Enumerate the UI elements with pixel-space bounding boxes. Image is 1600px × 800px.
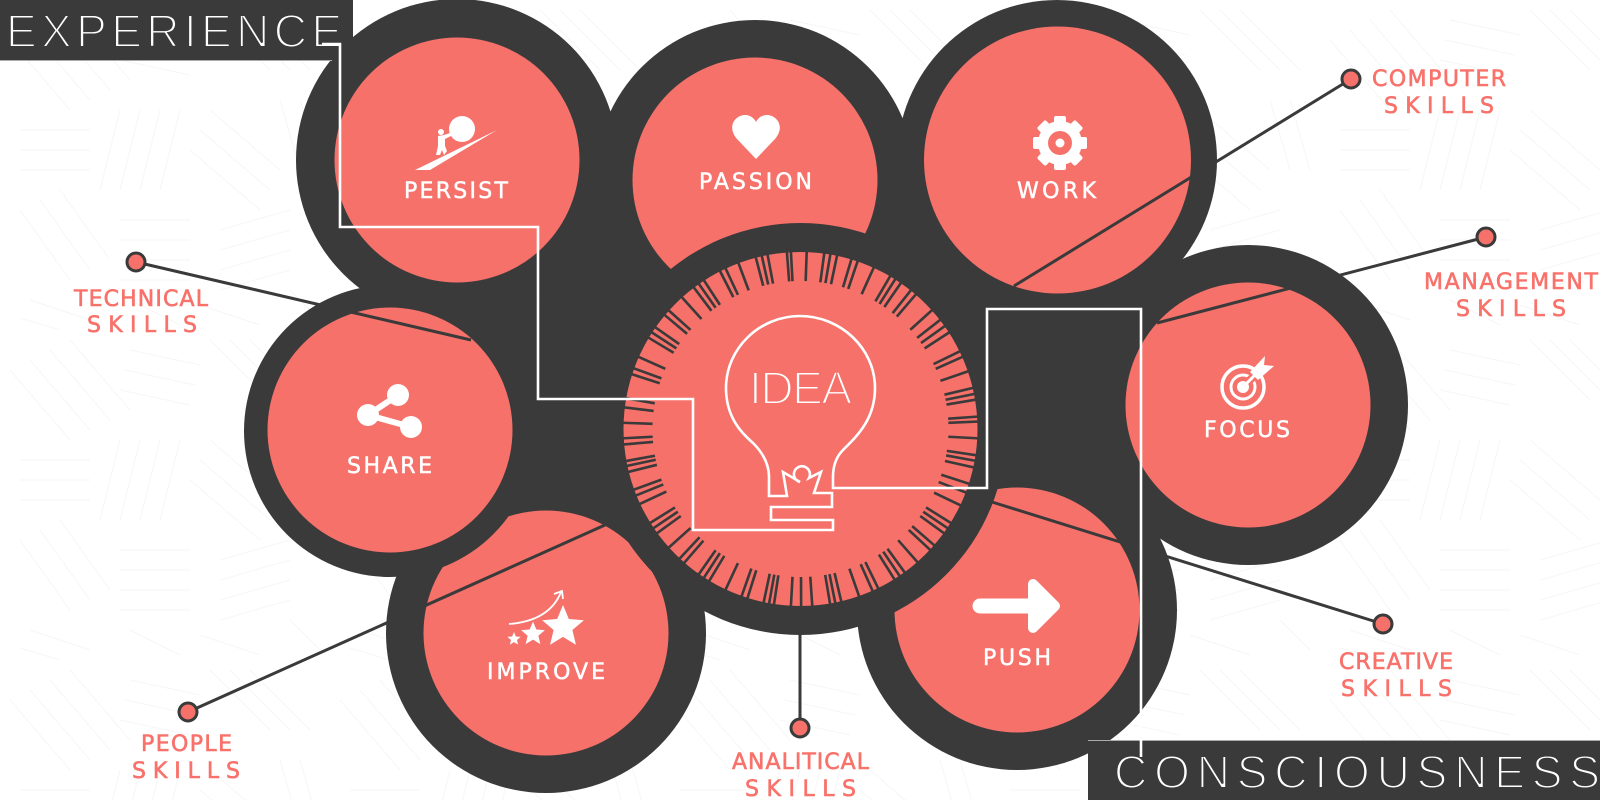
- label: management skills: SKILLS: [1456, 297, 1566, 322]
- label: computer skills: COMPUTER: [1372, 67, 1506, 92]
- panel: push circle: [857, 450, 1177, 770]
- icon: gear: [1033, 116, 1087, 170]
- label: persist: PERSIST: [404, 179, 509, 204]
- icon: target with dart: [1222, 356, 1274, 408]
- panel: central idea dial: [594, 223, 1006, 635]
- icon: right arrow: [980, 584, 1055, 628]
- idea label: IDEA: [749, 362, 852, 414]
- panel: focus circle: [1088, 245, 1408, 565]
- connector: creative skills: [992, 502, 1392, 633]
- label: analitical skills: ANALITICAL: [732, 750, 870, 775]
- label: computer skills: [1372, 67, 1506, 119]
- label: technical skills: [73, 287, 209, 338]
- label: people skills: [132, 732, 240, 784]
- icon: heart: [732, 115, 780, 159]
- label: analitical skills: [732, 750, 870, 800]
- connector: analitical skills: [791, 630, 809, 737]
- white path with idea bulb: [322, 44, 1141, 757]
- icon: stars with rising arrow: [507, 591, 584, 645]
- icon: sisyphus pushing boulder: [415, 116, 497, 170]
- label: management skills: [1424, 270, 1599, 322]
- label: technical skills: SKILLS: [87, 313, 197, 338]
- label: management skills: MANAGEMENT: [1424, 270, 1599, 295]
- label: creative skills: SKILLS: [1341, 677, 1452, 702]
- label: creative skills: [1339, 650, 1453, 702]
- label: improve: IMPROVE: [487, 660, 605, 685]
- label: people skills: SKILLS: [132, 759, 240, 784]
- panel: persist circle: [296, 0, 618, 321]
- connector: computer skills: [1014, 70, 1360, 286]
- dial tick marks: [622, 250, 979, 608]
- heading box: consciousness: CONSCIOUSNESS: [1114, 746, 1600, 798]
- label: push: PUSH: [983, 646, 1051, 671]
- label: technical skills: TECHNICAL: [73, 287, 209, 312]
- icon: share nodes: [357, 384, 422, 438]
- label: share: SHARE: [347, 454, 432, 479]
- panel: improve circle: [386, 473, 706, 793]
- panel: work circle: [897, 0, 1217, 320]
- label: people skills: PEOPLE: [141, 732, 232, 757]
- connector: technical skills: [127, 253, 471, 340]
- panel: share circle: [244, 285, 536, 577]
- label: work: WORK: [1017, 179, 1097, 204]
- label: focus: FOCUS: [1204, 418, 1290, 443]
- dark backing joining all circles: [390, 160, 1248, 633]
- connector: management skills: [1157, 228, 1495, 323]
- label: creative skills: CREATIVE: [1339, 650, 1453, 675]
- panel: passion circle: [595, 20, 915, 340]
- heading box: experience: EXPERIENCE: [6, 5, 342, 57]
- label: computer skills: SKILLS: [1384, 94, 1494, 119]
- label: passion: PASSION: [699, 170, 812, 195]
- connector: people skills: [179, 525, 605, 721]
